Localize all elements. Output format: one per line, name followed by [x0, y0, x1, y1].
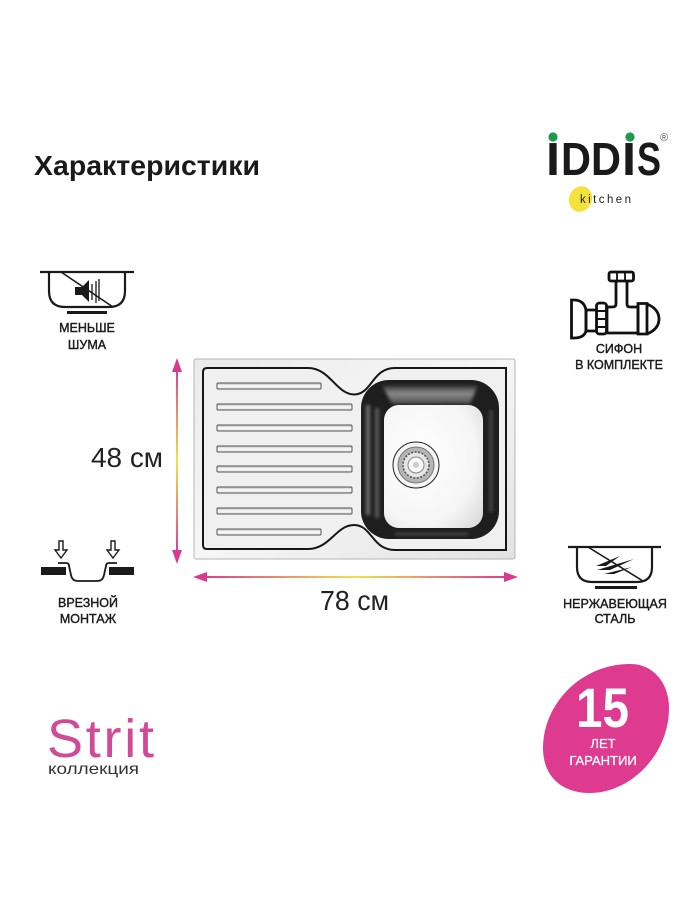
bowl wall shading [368, 385, 491, 534]
logo registered mark: ® [660, 132, 668, 144]
caption: flush mount: МОНТАЖ [60, 612, 117, 626]
icon: stainless steel [568, 547, 661, 588]
caption: siphon included: СИФОН [596, 342, 642, 356]
arrow: width [193, 572, 518, 582]
badge caption [569, 736, 637, 768]
warranty badge [543, 664, 669, 793]
logo wordmark: S [637, 133, 661, 185]
caption: less noise [59, 321, 115, 352]
icon: siphon included [572, 272, 659, 338]
collection caption: коллекция [48, 761, 139, 778]
logo: IDDIS kitchen [546, 132, 668, 215]
title: Характеристики [34, 150, 260, 181]
logo wordmark: D [591, 133, 621, 185]
drain [393, 442, 439, 488]
badge number: 15 [576, 676, 629, 739]
sink illustration [194, 359, 515, 559]
caption: siphon included [575, 342, 663, 372]
bowl floor [384, 405, 483, 528]
icon: less noise [40, 272, 134, 312]
collection name: Strit [47, 709, 154, 769]
logo wordmark [546, 133, 661, 185]
arrow: height [172, 358, 182, 564]
badge caption: ГАРАНТИИ [569, 753, 637, 768]
caption: stainless steel: НЕРЖАВЕЮЩАЯ [563, 597, 667, 611]
caption: flush mount [58, 595, 118, 626]
caption: siphon included: В КОМПЛЕКТЕ [575, 358, 663, 372]
logo green dots [548, 132, 635, 142]
drainboard ribs [217, 383, 352, 535]
caption: less noise: ШУМА [68, 338, 107, 352]
logo wordmark: D [561, 133, 591, 185]
caption: flush mount: ВРЕЗНОЙ [58, 595, 118, 610]
sink rim outline [203, 368, 506, 550]
sink plate [194, 359, 515, 559]
badge caption: ЛЕТ [590, 736, 616, 751]
logo kitchen text: kitchen [580, 194, 631, 206]
icon: flush mount [41, 541, 134, 581]
caption: stainless steel [563, 597, 667, 626]
badge shape [543, 664, 669, 793]
sink bowl [361, 380, 499, 539]
width label: 78 см [320, 585, 389, 616]
caption: less noise: МЕНЬШЕ [59, 321, 115, 335]
logo yellow blob [565, 183, 596, 215]
caption: stainless steel: СТАЛЬ [595, 612, 635, 626]
logo wordmark: I [622, 133, 636, 185]
height label: 48 см [91, 442, 163, 473]
logo wordmark: I [546, 133, 560, 185]
